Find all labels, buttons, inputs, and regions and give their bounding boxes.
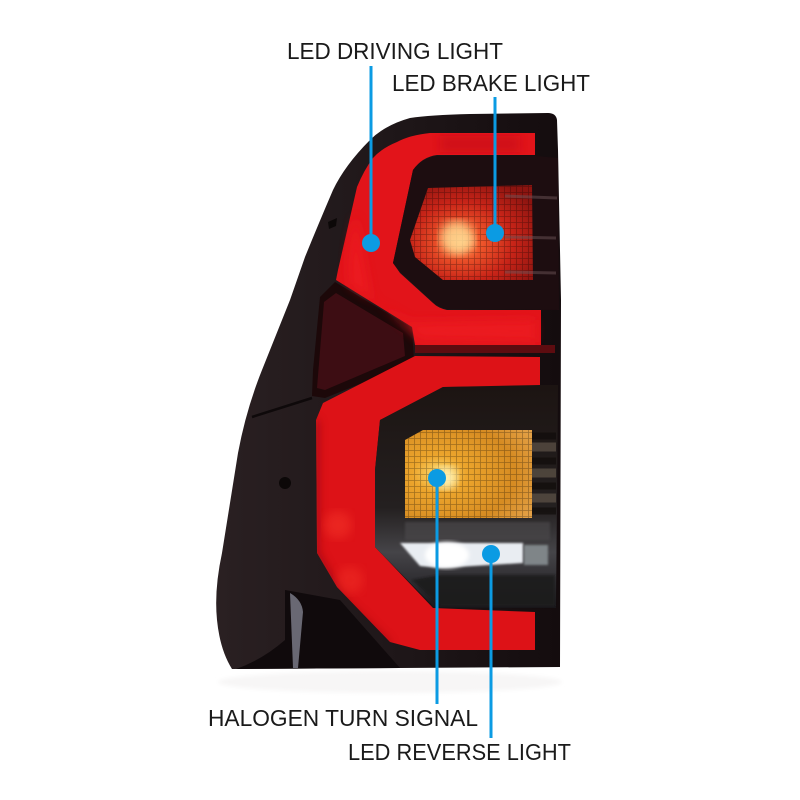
mounting bump [279, 477, 291, 489]
turn signal lens [405, 430, 532, 518]
callout: LED driving light [287, 38, 503, 252]
divider band [415, 345, 555, 353]
reflector [312, 282, 414, 398]
housing seam [252, 398, 312, 417]
label: LED brake light: LED BRAKE LIGHT [392, 70, 590, 96]
lower red light bar [316, 356, 540, 650]
upper lens housing [393, 156, 559, 310]
label: LED driving light: LED DRIVING LIGHT [287, 38, 503, 64]
label: halogen turn signal: HALOGEN TURN SIGNAL [208, 705, 478, 731]
reverse light glow [400, 543, 523, 568]
callout: LED brake light [392, 70, 590, 242]
housing lower shadow [236, 590, 400, 669]
tail light assembly [216, 113, 561, 669]
brake lens [410, 185, 557, 280]
label: LED reverse light: LED REVERSE LIGHT [348, 739, 571, 765]
ground shadow [218, 671, 562, 693]
callout: halogen turn signal [208, 469, 478, 731]
silver sliver [290, 593, 303, 668]
housing [216, 113, 561, 669]
callout: LED reverse light [348, 545, 571, 765]
upper red light bar [336, 133, 541, 345]
lower lens [375, 385, 558, 608]
mounting bump upper [328, 218, 337, 229]
